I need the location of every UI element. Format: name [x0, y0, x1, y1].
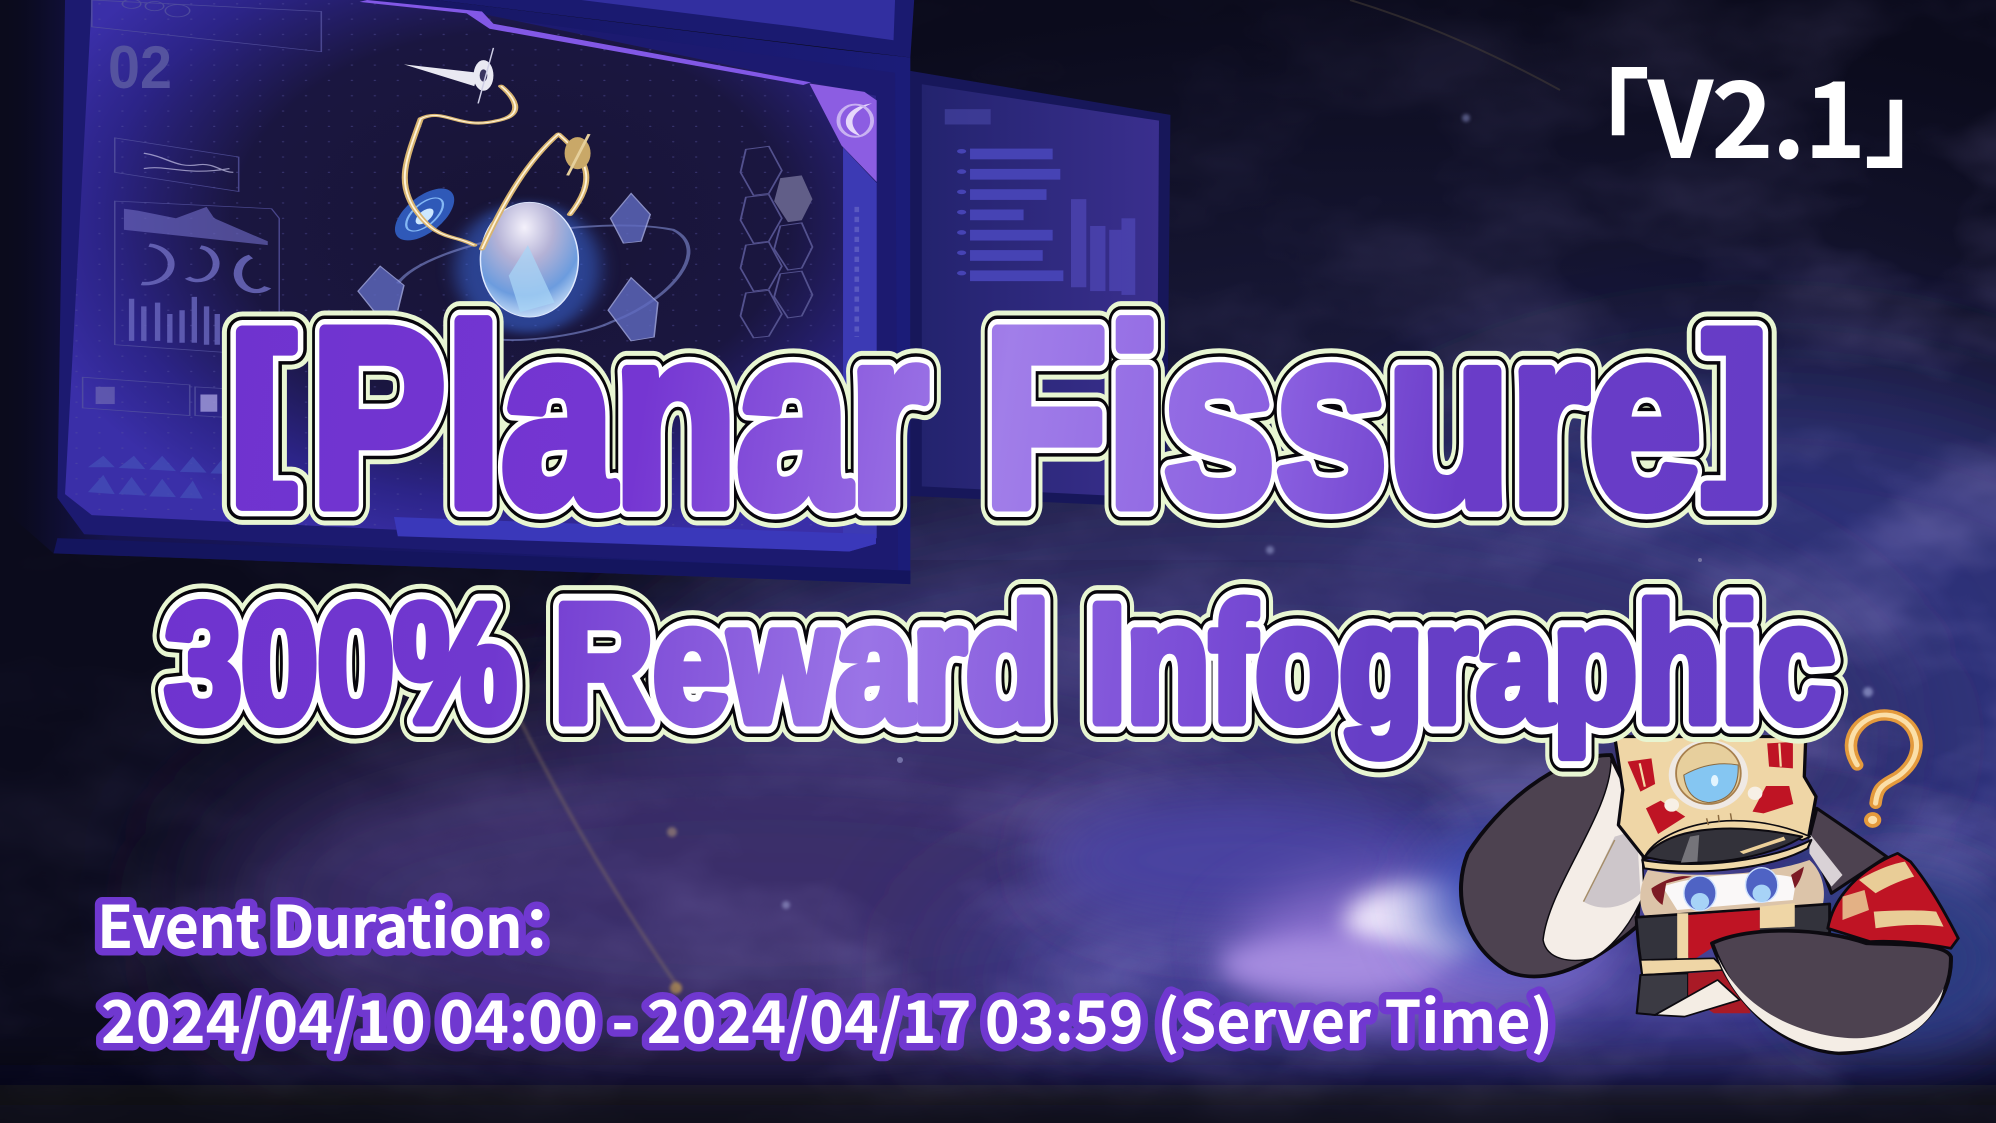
title: Planar Fissure: ]: [1705, 300, 1767, 506]
title: Planar Fissure: ]: [1705, 300, 1767, 506]
title: Planar Fissure: [: [232, 300, 294, 506]
arrow spacecraft: [404, 64, 478, 86]
big readout number: 02: [108, 34, 172, 101]
illustration: sci-fi monitors: [0, 0, 1170, 584]
hat crown: [1615, 737, 1816, 858]
title: Planar Fissure: [: [232, 300, 294, 506]
swoosh emblem: [846, 103, 872, 136]
uniform: [1636, 904, 1830, 973]
sleeve band: [1828, 853, 1958, 948]
event dates: 2024/04/10 04:00 - 2024/04/17 03:59 (Server Time): [101, 975, 1553, 1060]
face: [1640, 860, 1824, 920]
right edge micro text strip: [854, 207, 860, 337]
hexagon buttons: [741, 146, 812, 338]
top monitor: [436, 0, 914, 57]
ringed planet: [565, 137, 591, 169]
version tag: 「V2.1」: [1544, 35, 1970, 189]
mascot: Pom-Pom conductor: [1461, 715, 1958, 1053]
bottom screen lip and dark bezel shading: [54, 538, 910, 584]
main monitor: [0, 0, 910, 584]
title: Planar Fissure: ]: [1705, 300, 1767, 506]
side monitor: [910, 71, 1170, 507]
back ear: [1809, 808, 1887, 893]
title: Planar Fissure: [: [232, 300, 294, 506]
left ear: [1461, 755, 1644, 977]
glow around orb: [455, 203, 601, 333]
HUD panels: [83, 0, 321, 419]
orb: [480, 202, 578, 317]
hat visor: [1645, 821, 1810, 857]
event duration label: Event Duration：: [97, 880, 581, 965]
polyhedra: [358, 193, 658, 341]
title: Planar Fissure: ]: [1705, 300, 1767, 506]
front ear: [1712, 931, 1951, 1053]
event dates: 2024/04/10 04:00 - 2024/04/17 03:59 (Server Time): [101, 975, 1553, 1060]
question mark: [1851, 715, 1916, 826]
orbit ring: [398, 225, 689, 340]
golden ribbons: [405, 86, 586, 249]
event duration label: Event Duration：: [97, 880, 581, 965]
eyes: [1684, 876, 1716, 911]
spiral galaxy: [383, 185, 466, 244]
title: Planar Fissure: [: [232, 300, 294, 506]
